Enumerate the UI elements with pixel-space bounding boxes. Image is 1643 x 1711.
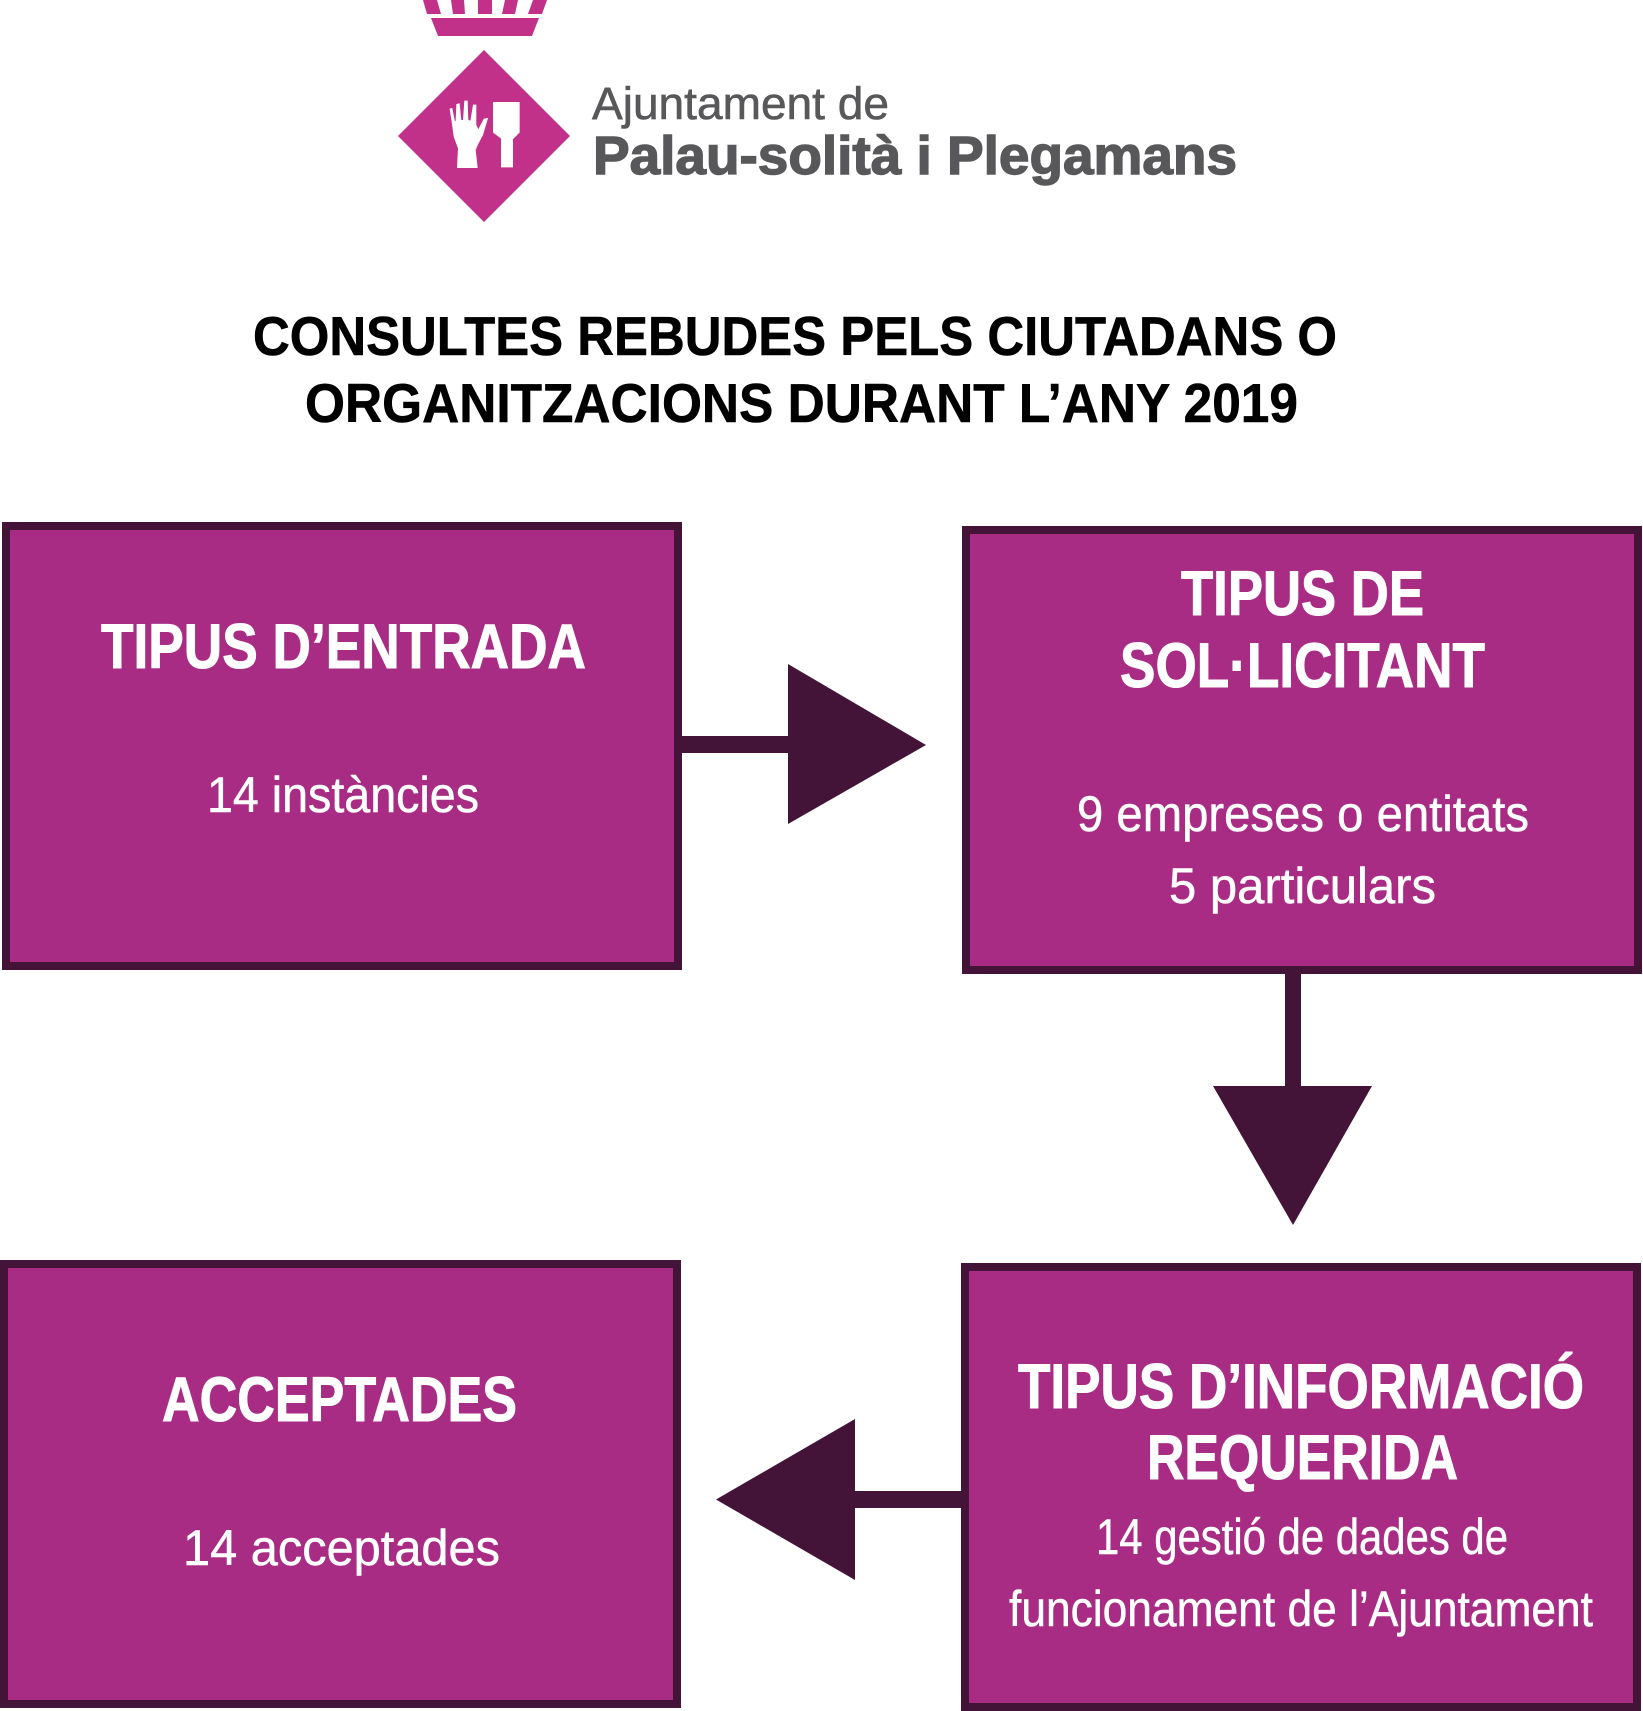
arrow: sol·licitant to informació — [1213, 974, 1372, 1225]
panel heading — [1120, 559, 1485, 701]
panel text: 14 gestió de dades de — [1096, 1509, 1508, 1565]
arrow: entrada to sol·licitant — [682, 664, 926, 824]
panel heading: TIPUS D’ENTRADA — [101, 612, 586, 682]
title — [253, 305, 1337, 434]
panel text — [1009, 1509, 1593, 1637]
logo text: Ajuntament de: Ajuntament de — [592, 78, 889, 129]
logo text: Palau-solità i Plegamans: Palau-solità i Plegamans — [593, 126, 1237, 186]
icon: diamond shield with hand and paddle — [398, 50, 570, 222]
panel: acceptades — [4, 1264, 677, 1704]
arrow: informació to acceptades — [716, 1419, 962, 1580]
panel: tipus d'informació requerida — [965, 1267, 1637, 1707]
panel text — [1077, 786, 1529, 914]
logo: Ajuntament de Palau-solità i Plegamans — [398, 0, 1237, 222]
panel: tipus de sol·licitant — [966, 530, 1638, 970]
panel heading: TIPUS DE — [1181, 559, 1424, 629]
title: ORGANITZACIONS DURANT L’ANY 2019 — [305, 372, 1298, 434]
panel text: 14 acceptades — [183, 1520, 500, 1576]
panel: tipus d'entrada — [6, 526, 678, 966]
panel heading: ACCEPTADES — [162, 1365, 517, 1435]
panel text: 9 empreses o entitats — [1077, 786, 1529, 842]
panel heading: REQUERIDA — [1147, 1423, 1458, 1493]
title: CONSULTES REBUDES PELS CIUTADANS O — [253, 305, 1337, 367]
icon: crown — [423, 0, 547, 36]
panel heading — [1018, 1352, 1584, 1493]
panel heading: SOL·LICITANT — [1120, 631, 1485, 701]
panel text: 5 particulars — [1169, 858, 1436, 914]
panel text: 14 instàncies — [207, 767, 479, 823]
